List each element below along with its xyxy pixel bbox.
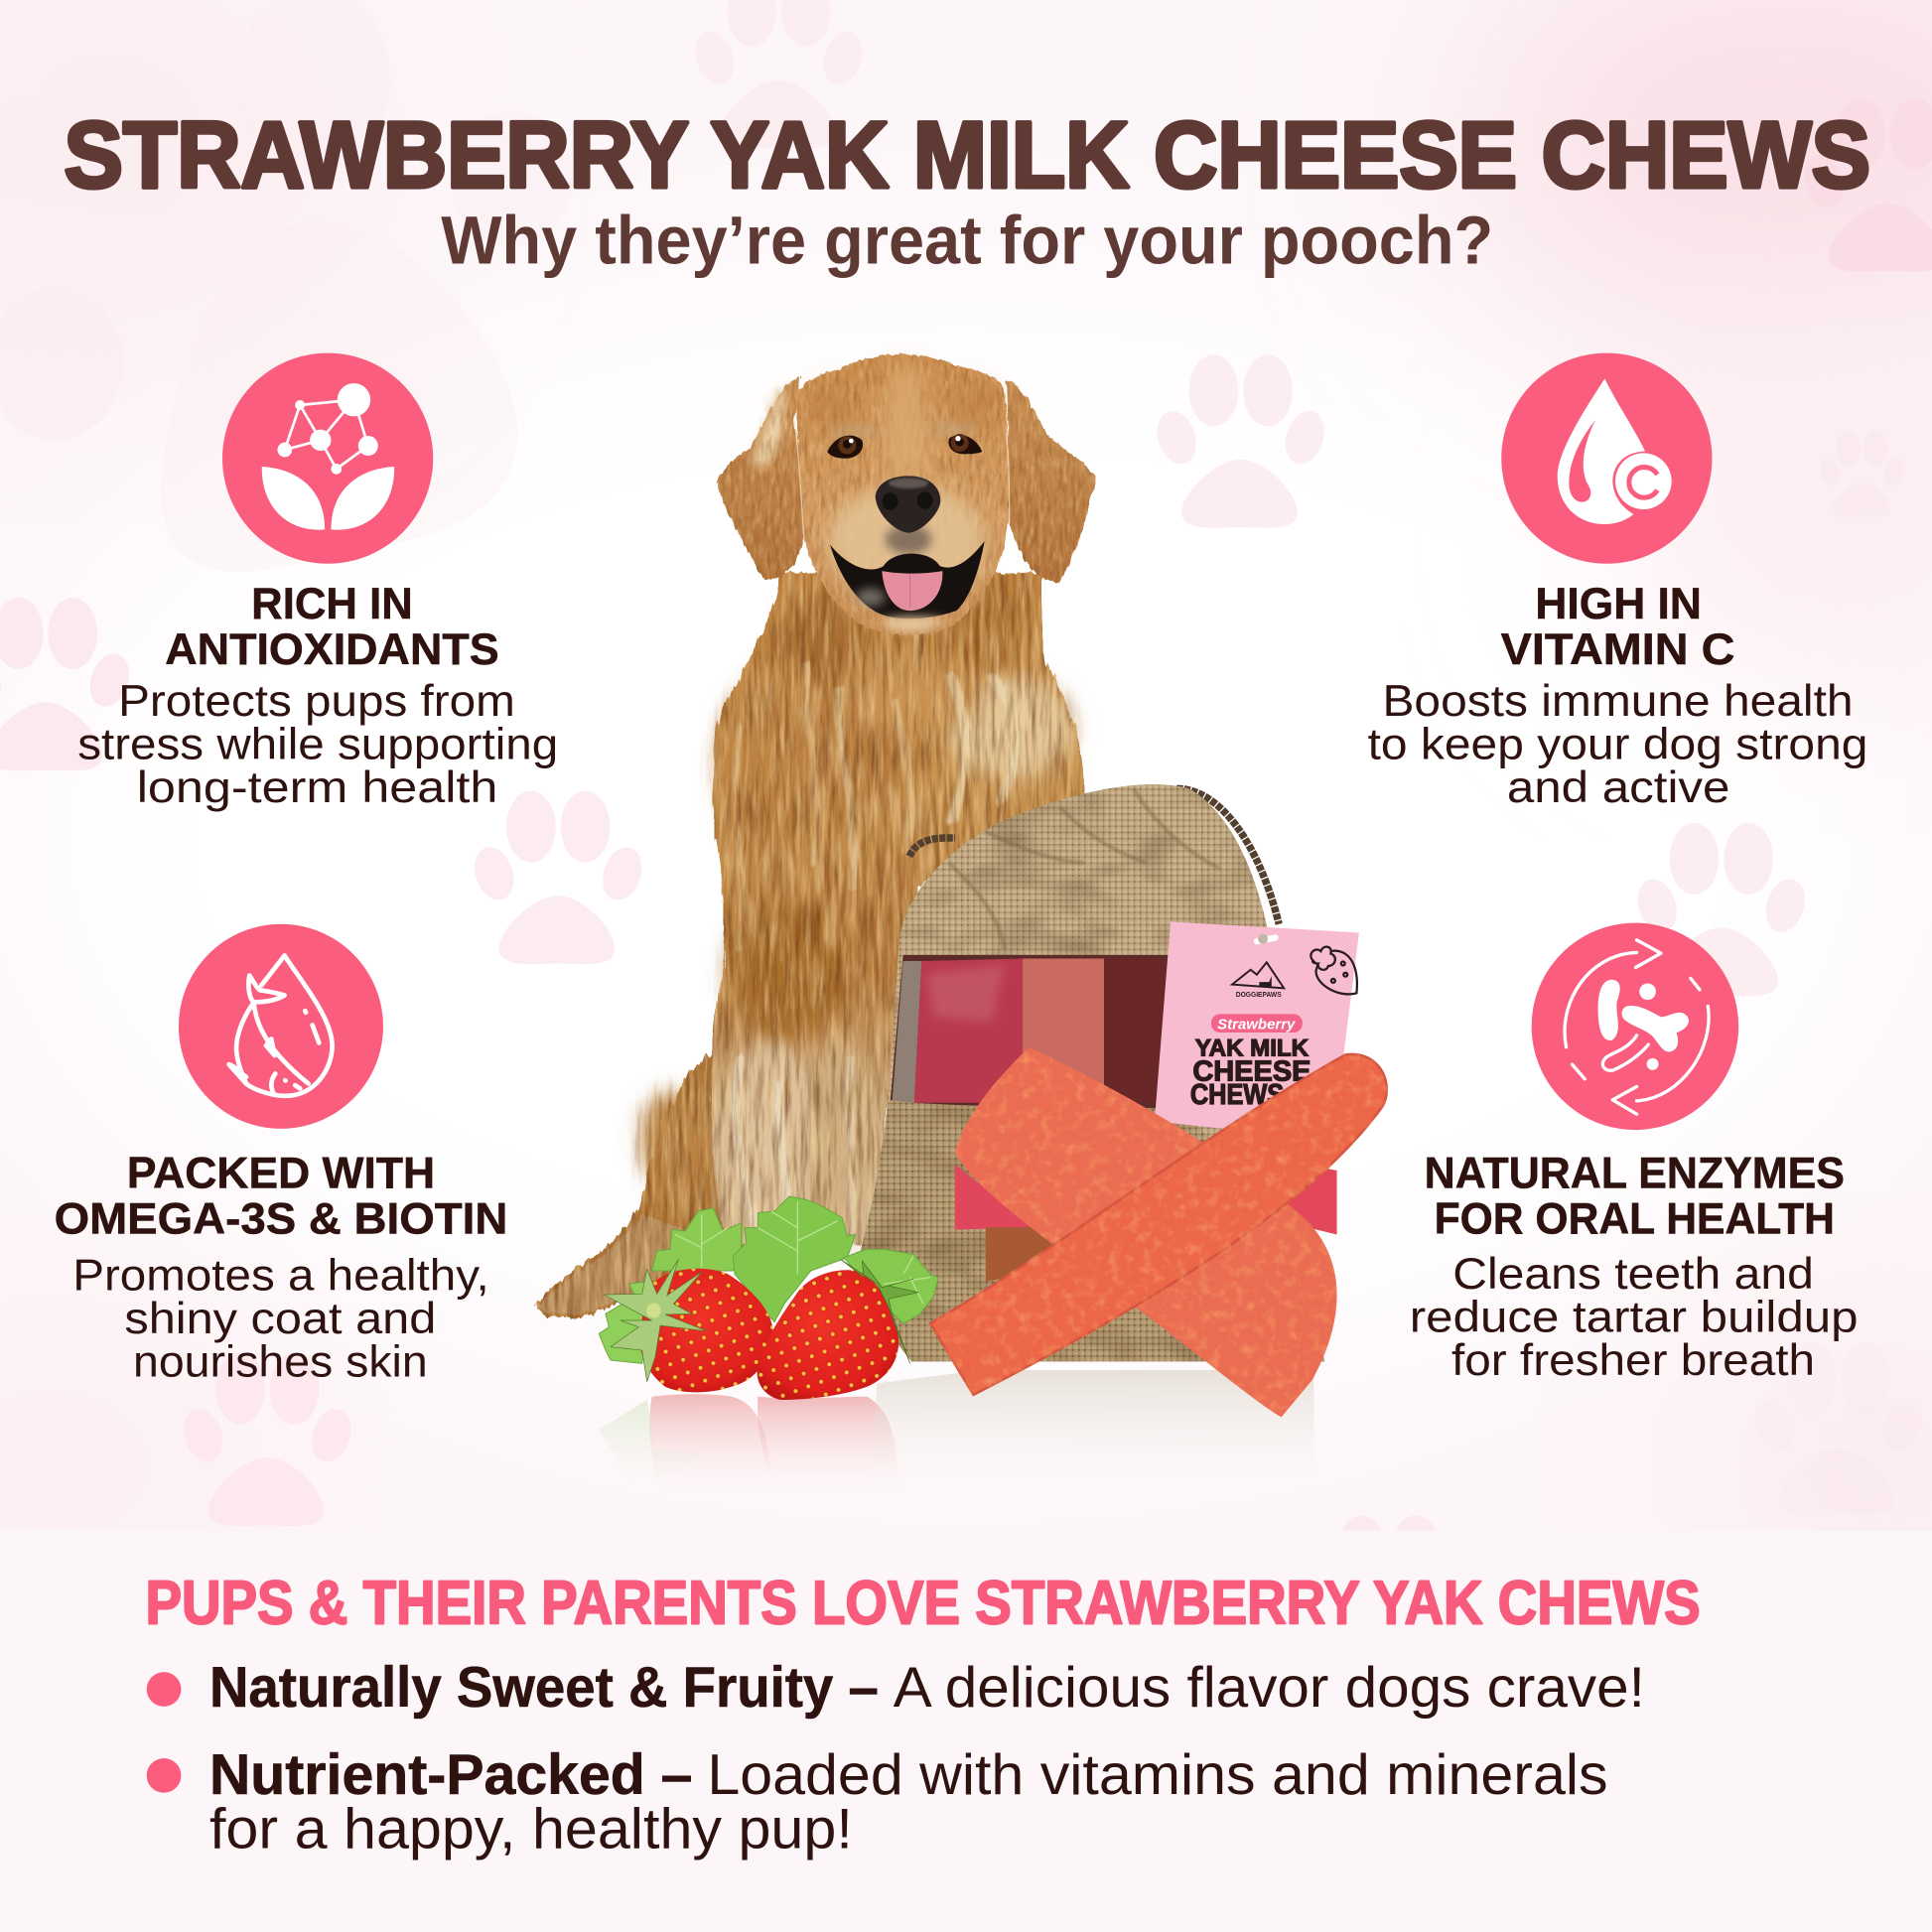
- heading: [55, 1149, 507, 1243]
- dog eyes: [827, 434, 982, 459]
- heading: FOR ORAL HEALTH: [1435, 1194, 1835, 1243]
- description: reduce tartar buildup: [1410, 1294, 1859, 1342]
- red chew slices behind: [955, 1131, 1337, 1282]
- dog skull: [796, 354, 1009, 634]
- heading: PACKED WITH: [127, 1149, 435, 1197]
- description: long-term health: [137, 763, 497, 812]
- dog left ear: [717, 377, 804, 580]
- title: STRAWBERRY YAK MILK CHEESE CHEWS: [65, 103, 1870, 207]
- description: to keep your dog strong: [1368, 720, 1867, 768]
- description: shiny coat and: [124, 1295, 436, 1343]
- floor reflection: [599, 1370, 1313, 1502]
- dog nose: [876, 476, 940, 554]
- bullet: nutrient-packed: for a happy, healthy pup!: [209, 1798, 853, 1862]
- strawberry right: [758, 1270, 898, 1400]
- label product name: CHEESE: [1192, 1055, 1311, 1087]
- label logo: DOGGIEPAWS: [1236, 990, 1282, 999]
- bullet: naturally sweet: [147, 1656, 1645, 1720]
- dog head fur: [717, 354, 1095, 634]
- bag lower band: [859, 1100, 1324, 1361]
- product: burlap bag: [859, 784, 1324, 1361]
- bag drawstring: [909, 788, 1279, 924]
- description: [72, 1251, 489, 1386]
- strawberry leaves: [599, 1196, 938, 1363]
- heading: [1501, 580, 1734, 674]
- bag body: [859, 784, 1324, 1361]
- heading: OMEGA-3S & BIOTIN: [55, 1194, 507, 1243]
- description: Boosts immune health: [1382, 677, 1854, 726]
- label pill text: Strawberry: [1217, 1017, 1296, 1033]
- panel: rich in antioxidants: [77, 353, 558, 812]
- product label card: [1155, 921, 1359, 1134]
- bullet: naturally sweet: A delicious flavor dogs crave!: [894, 1656, 1645, 1720]
- heading: [1425, 1149, 1845, 1243]
- dog: [535, 354, 1095, 1317]
- label strawberry doodle: [1311, 947, 1357, 994]
- subtitle: Why they’re great for your pooch?: [441, 204, 1493, 279]
- panel: natural enzymes: [1410, 923, 1859, 1385]
- bottom heading: PUPS & THEIR PARENTS LOVE STRAWBERRY YAK CHEWS: [145, 1570, 1701, 1638]
- heading: RICH IN: [251, 580, 413, 628]
- chews inside bag: [893, 959, 1171, 1103]
- chew strip lower: [955, 1047, 1337, 1417]
- description: Promotes a healthy,: [72, 1251, 489, 1300]
- dog mouth: [830, 541, 985, 631]
- dog face markings: [794, 367, 1010, 603]
- leaf veins: [675, 1201, 930, 1304]
- icon: antioxidants: [222, 353, 433, 564]
- description: stress while supporting: [77, 720, 558, 768]
- label product name: CHEWS: [1190, 1079, 1284, 1111]
- panel: high in vitamin c: [1368, 353, 1867, 812]
- bullet: nutrient-packed: Loaded with vitamins and minerals: [707, 1743, 1608, 1807]
- heading: VITAMIN C: [1501, 625, 1734, 674]
- label product name: YAK MILK: [1195, 1035, 1309, 1061]
- label pill: [1211, 1014, 1303, 1033]
- icon: fish drop: [179, 924, 383, 1129]
- description: [77, 677, 558, 812]
- description: [1410, 1250, 1859, 1385]
- icon: enzymes cycle: [1532, 923, 1738, 1130]
- label product name: [1190, 1035, 1311, 1111]
- bottom panel: [0, 1530, 1932, 1932]
- description: for fresher breath: [1451, 1336, 1815, 1385]
- heading: [165, 580, 499, 674]
- strawberry left: [640, 1269, 772, 1392]
- heading: NATURAL ENZYMES: [1425, 1149, 1845, 1197]
- strawberry right calyx: [841, 1259, 918, 1363]
- dog right ear: [1006, 380, 1095, 583]
- icon: vitamin c drop: [1501, 353, 1712, 564]
- dog hind leg and tail: [535, 1047, 763, 1317]
- description: nourishes skin: [133, 1337, 428, 1386]
- strawberries: [599, 1196, 938, 1400]
- description: Protects pups from: [118, 677, 515, 726]
- bullet: nutrient-packed: [147, 1743, 1608, 1862]
- description: Cleans teeth and: [1452, 1250, 1814, 1299]
- bag window: [890, 955, 1171, 1109]
- dog body: [711, 573, 1085, 1251]
- description: and active: [1507, 763, 1729, 812]
- description: [1368, 677, 1867, 812]
- bag gathered folds: [949, 788, 1220, 949]
- heading: HIGH IN: [1535, 580, 1702, 628]
- strawberry left calyx: [604, 1259, 707, 1382]
- chew strip upper: [930, 1054, 1387, 1395]
- heading: ANTIOXIDANTS: [165, 625, 499, 674]
- bullet: nutrient-packed: Nutrient-Packed –: [209, 1743, 692, 1807]
- bullet: naturally sweet: Naturally Sweet & Fruity –: [209, 1656, 879, 1720]
- label logo: [1232, 962, 1284, 999]
- panel: omega-3s and biotin: [55, 924, 507, 1386]
